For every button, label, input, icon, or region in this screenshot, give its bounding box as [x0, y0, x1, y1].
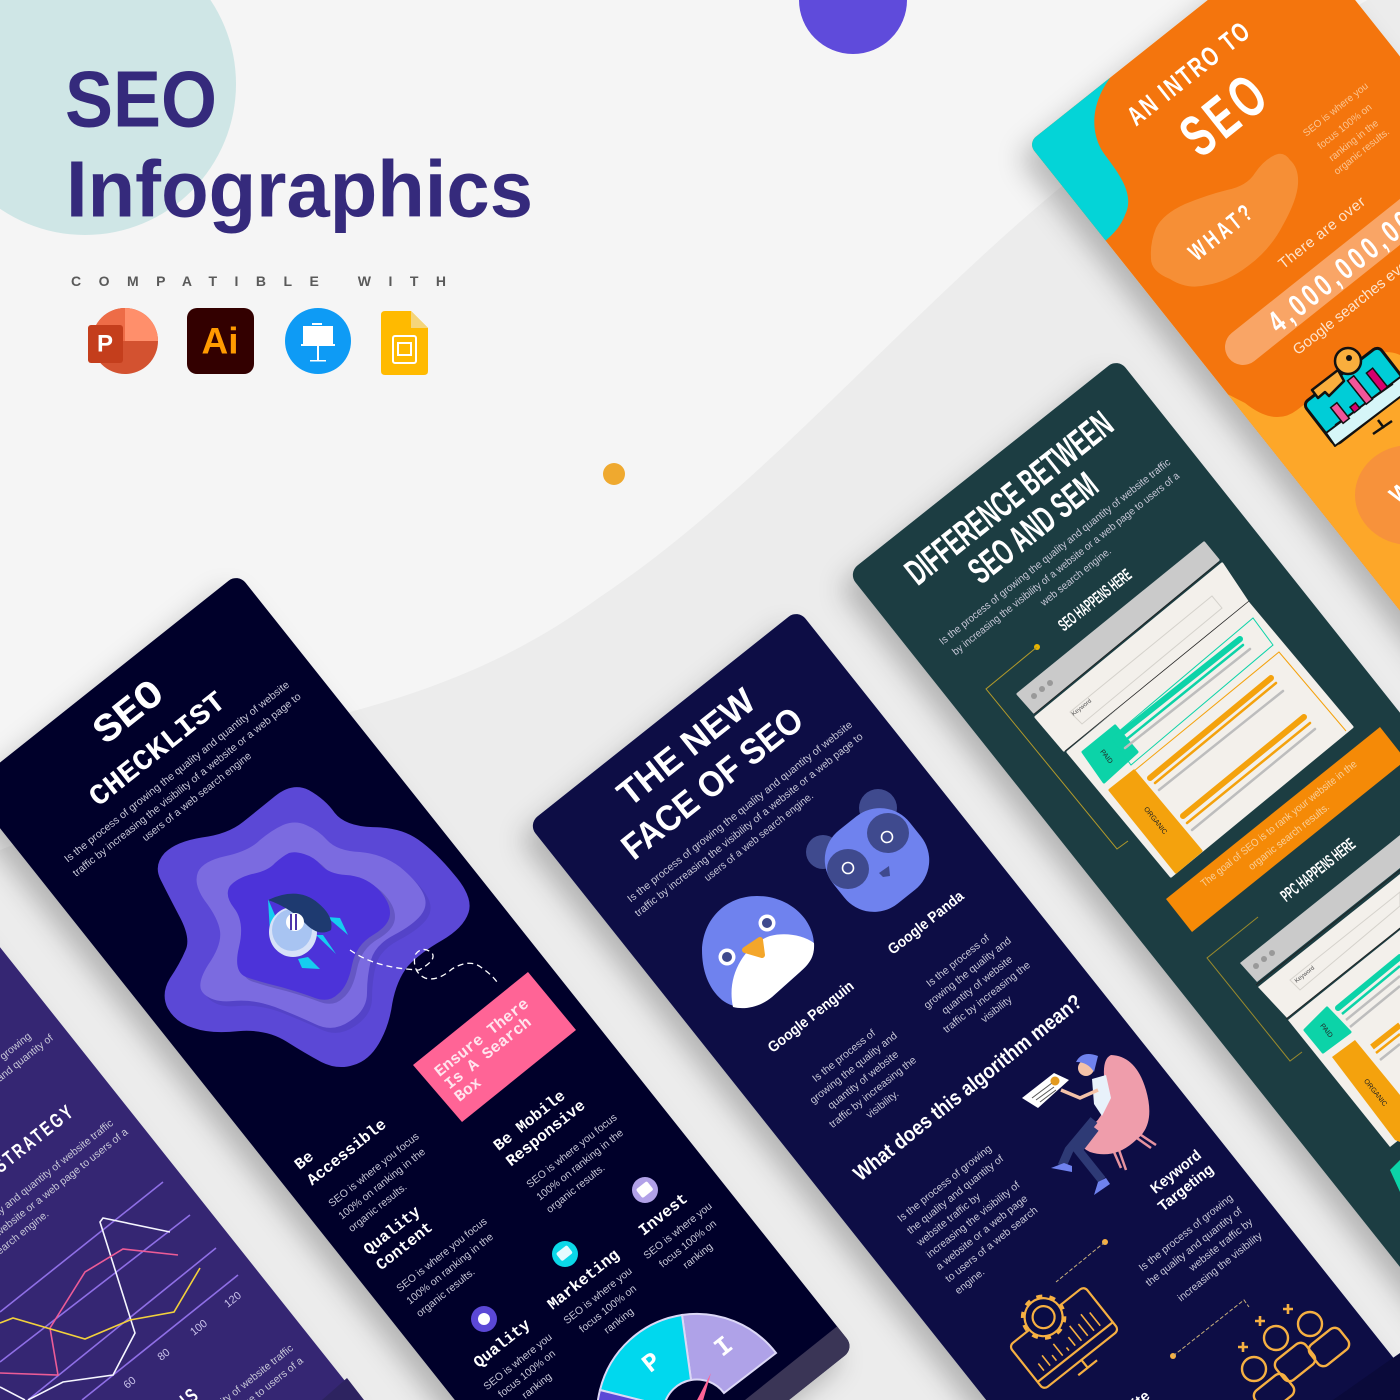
browser mockup: PPC: ORGANIC — [1362, 1078, 1388, 1108]
penguin description: traffic by increasing the — [827, 1054, 919, 1131]
label: Google Penguin: Google Penguin — [765, 978, 857, 1056]
browser mockup: PPC: Keyword — [1294, 965, 1316, 985]
decorative purple circle — [799, 0, 907, 54]
banner: goal of SEO: organic search results. — [1246, 801, 1332, 873]
panda description: quantity of website — [940, 953, 1015, 1017]
intro paragraph: users of a web search engine. — [702, 790, 816, 884]
algorithm paragraph — [894, 1141, 1054, 1298]
item: be mobile responsive: Be Mobile — [490, 1087, 569, 1155]
keyword paragraph: increasing the visibility — [1175, 1229, 1265, 1304]
icon: panda — [806, 789, 945, 927]
icon: Illustrator — [187, 308, 254, 374]
panda description — [912, 923, 1043, 1048]
line chart — [0, 1182, 238, 1400]
heading: difference between SEO and SEM: DIFFERENCE BETWEEN — [897, 403, 1121, 593]
title: SEO — [65, 54, 217, 144]
checklist intro paragraph: users of a web search engine — [140, 750, 254, 844]
item: quality: focus 100% on — [496, 1348, 558, 1400]
item: quality: SEO is where you — [481, 1331, 555, 1393]
item: invest: ranking — [681, 1240, 715, 1271]
algorithm paragraph: a website or a web page — [934, 1193, 1030, 1273]
item: quality content — [360, 1203, 509, 1320]
item: invest: Invest — [635, 1190, 692, 1240]
penguin description: visibility. — [864, 1088, 901, 1121]
keyword paragraph: Is the process of growing — [1137, 1192, 1236, 1274]
icon: PowerPoint — [88, 308, 158, 374]
item: be mobile responsive: 100% on ranking in the — [534, 1127, 626, 1203]
penguin description: quantity of website — [826, 1048, 901, 1112]
heading: an intro to SEO — [1121, 15, 1283, 169]
callout: ensure there is a search box: Ensure There — [431, 995, 533, 1081]
item: be accessible: 100% on ranking in the — [336, 1146, 428, 1222]
heading: SEO checklist: SEO — [86, 672, 174, 756]
browser mockup: PPC: PAID — [1318, 1023, 1334, 1039]
heading: keyword targeting: Targeting — [1155, 1161, 1217, 1215]
penguin description — [798, 1018, 929, 1143]
panda description: Is the process of — [924, 932, 992, 990]
callout: ensure there is a search box: Is A Search — [441, 1014, 535, 1094]
banner: goal of SEO: The goal of SEO is to rank your website in the — [1199, 758, 1360, 890]
heading: an intro to SEO: SEO — [1167, 59, 1283, 169]
item: quality content: Quality — [360, 1203, 425, 1259]
icon: monitor with gear — [995, 1239, 1125, 1398]
item: quality content: SEO is where you focus — [394, 1216, 489, 1295]
panel: SEO checklist card — [0, 573, 870, 1400]
lower blob — [1355, 445, 1400, 545]
banner: goal of SEO — [1166, 727, 1400, 932]
what blob: WHAT? — [1184, 198, 1260, 266]
browser mockup: SEO: PAID — [1098, 749, 1114, 765]
icon: PowerPoint: P — [97, 330, 113, 358]
title: Infographics — [66, 144, 533, 234]
gauge chart — [597, 1314, 776, 1400]
icon: Illustrator: Ai — [202, 320, 238, 362]
browser mockup: PPC — [1240, 835, 1400, 1192]
checklist intro paragraph: traffic by increasing the visibility of a website or a web page to — [71, 691, 304, 879]
heading: an intro to SEO: AN INTRO TO — [1121, 15, 1257, 131]
decorative teal circle — [0, 0, 236, 235]
item: be accessible: Accessible — [304, 1116, 390, 1190]
chart axis labels: 100 — [188, 1318, 210, 1338]
algorithm paragraph: increasing the visibility of — [924, 1179, 1022, 1261]
keyword paragraph: the quality and quantity of — [1143, 1205, 1245, 1289]
heading: SEO checklist: CHECKLIST — [83, 686, 233, 814]
item: be accessible — [291, 1100, 441, 1235]
algorithm paragraph: the quality and quantity of — [905, 1153, 1006, 1237]
browser mockup: SEO — [1018, 543, 1352, 876]
compatible with label: COMPATIBLE WITH — [71, 273, 446, 289]
heading: what does this algorithm mean: What does this algorithm mean? — [849, 990, 1087, 1186]
icon: Keynote — [285, 308, 351, 374]
panel: SEO strategy card — [0, 644, 370, 1400]
intro paragraph: Is the process of growing the quality and quantity of website — [625, 719, 855, 905]
layered blob illustration — [158, 787, 470, 1067]
item: marketing: ranking — [602, 1305, 636, 1336]
icon: monitor with key — [1303, 346, 1400, 446]
item: invest — [632, 1177, 719, 1271]
icon: penguin — [702, 896, 814, 1008]
gauge chart: P — [637, 1346, 667, 1380]
panda description: traffic by increasing the — [941, 959, 1033, 1036]
callout: ensure there is a search box — [413, 972, 576, 1122]
what paragraph: SEO is where you — [1301, 81, 1371, 139]
what paragraph — [1301, 81, 1392, 177]
item: quality: Quality — [470, 1316, 535, 1372]
chart axis labels: 80 — [155, 1346, 173, 1364]
algorithm paragraph: to users of a web search — [943, 1204, 1040, 1285]
keyword paragraph: website traffic by — [1186, 1216, 1256, 1275]
what paragraph: ranking in the — [1327, 118, 1381, 164]
item: marketing: Marketing — [544, 1246, 623, 1314]
label: Google Panda: Google Panda — [885, 887, 968, 958]
teal corner blob — [1032, 78, 1128, 241]
item: quality — [470, 1306, 558, 1400]
item: invest: focus 100% on — [657, 1218, 719, 1270]
connector: PPC bracket — [1207, 917, 1302, 1061]
connector: SEO bracket — [986, 644, 1128, 849]
chart axis labels — [121, 1290, 244, 1392]
label: SEO happens here: SEO HAPPENS HERE — [1055, 565, 1135, 635]
item: invest: SEO is where you — [641, 1200, 715, 1262]
item: marketing — [544, 1241, 639, 1336]
item: be mobile responsive: organic results. — [544, 1162, 607, 1216]
heading: difference between SEO and SEM — [897, 403, 1121, 593]
callout: ensure there is a search box: Box — [451, 1074, 485, 1106]
item: be accessible: SEO is where you focus — [326, 1131, 421, 1210]
illustration: person on pink chair — [1022, 1054, 1156, 1195]
heading: the new face of SEO: THE NEW — [609, 680, 763, 814]
what blob — [1151, 154, 1298, 287]
intro paragraph: by increasing the visibility of a website or a web page to users of a — [950, 470, 1182, 658]
item: quality content: organic results. — [414, 1266, 477, 1320]
panda description: visibility — [979, 993, 1015, 1025]
icon: Google Slides — [381, 311, 428, 375]
penguin description: growing the quality and — [808, 1030, 900, 1106]
panel: difference between SEO and SEM card — [848, 358, 1400, 1342]
heading: difference between SEO and SEM: SEO AND SEM — [960, 464, 1106, 592]
item: be mobile responsive: SEO is where you focus — [524, 1112, 619, 1191]
panel: an intro to SEO card — [1013, 0, 1400, 658]
algorithm paragraph: engine. — [953, 1266, 987, 1297]
intro paragraph: traffic by increasing the visibility of a website or a web page to — [633, 731, 866, 919]
checklist intro paragraph: Is the process of growing the quality and quantity of website — [62, 679, 292, 865]
item: be accessible: organic results. — [346, 1181, 409, 1235]
item: quality content: 100% on ranking in the — [404, 1231, 496, 1307]
stat: four billion searches: There are over — [1275, 193, 1369, 273]
panel: the new face of SEO card — [528, 609, 1400, 1400]
icon: rocket — [268, 894, 348, 969]
chart axis labels: 120 — [222, 1290, 244, 1310]
penguin description: Is the process of — [810, 1027, 878, 1085]
keyword paragraph — [1137, 1192, 1265, 1304]
icon: people group — [1170, 1300, 1352, 1400]
algorithm paragraph: Is the process of growing — [895, 1143, 994, 1225]
item: be mobile responsive: Responsive — [503, 1097, 589, 1171]
what paragraph: focus 100% on — [1316, 102, 1374, 152]
item: quality content: Content — [373, 1219, 437, 1275]
heading: the new face of SEO: FACE OF SEO — [613, 698, 811, 868]
item: marketing: focus 100% on — [577, 1283, 639, 1335]
item: be accessible: Be — [291, 1148, 318, 1174]
rocket dashed flight path — [350, 949, 497, 982]
heading: keyword targeting: Keyword — [1147, 1147, 1205, 1197]
chart axis labels: 60 — [121, 1374, 139, 1392]
decorative orange dot — [603, 463, 625, 485]
item: be mobile responsive — [490, 1081, 639, 1216]
what paragraph: organic results. — [1332, 127, 1392, 177]
browser mockup: SEO: Keyword — [1071, 698, 1093, 718]
intro paragraph: web search engine. — [1037, 545, 1114, 609]
item: marketing: SEO is where you — [561, 1265, 635, 1327]
lower yellow section — [1228, 352, 1400, 610]
intro paragraph: Is the process of growing the quality and quantity of website traffic — [937, 456, 1173, 648]
panda description: growing the quality and — [922, 935, 1014, 1011]
title — [65, 54, 533, 234]
browser mockup: SEO: ORGANIC — [1142, 806, 1168, 836]
algorithm paragraph: website traffic by — [914, 1190, 984, 1249]
gauge chart: I — [709, 1330, 739, 1364]
